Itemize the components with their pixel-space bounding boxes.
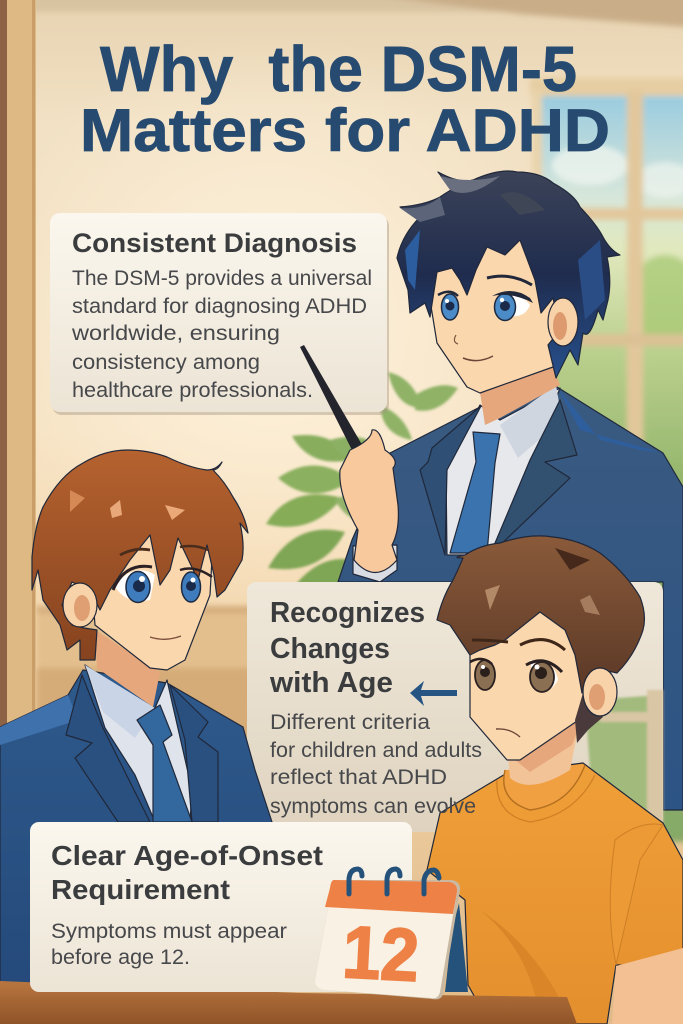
left student eyes — [113, 546, 212, 602]
right student neck — [507, 720, 580, 785]
right student collar — [504, 765, 585, 810]
right student hair — [437, 536, 644, 693]
teacher cuff — [353, 545, 397, 582]
left student tie — [137, 705, 192, 822]
left student lapels — [66, 675, 150, 822]
calendar number: 12 — [341, 910, 421, 997]
plant — [266, 372, 458, 588]
card text: recognizes changes with age — [269, 597, 482, 818]
calendar rings — [349, 869, 439, 894]
arrow — [410, 681, 457, 706]
teacher figure — [338, 171, 683, 810]
right student shirt folds — [610, 824, 663, 965]
body text: before age 12. — [51, 946, 190, 969]
heading: with Age — [269, 667, 393, 699]
left student shirt — [85, 665, 192, 822]
right student ear — [583, 668, 617, 716]
teacher lapels — [420, 406, 481, 555]
heading: Consistent Diagnosis — [72, 228, 357, 258]
right student shirt — [427, 763, 683, 1024]
body text: Symptoms must appear — [51, 920, 287, 943]
right student — [427, 536, 683, 1024]
body text: reflect that ADHD — [270, 766, 447, 789]
body text: symptoms can evolve — [270, 795, 476, 818]
window view through card edge — [585, 690, 663, 832]
heading — [269, 597, 425, 699]
right student arm — [612, 948, 683, 1024]
title: Matters for ADHD — [80, 97, 610, 164]
teacher neck — [480, 367, 560, 425]
icon: calendar — [315, 869, 468, 999]
left student neck — [95, 630, 160, 707]
body text: consistency among — [72, 351, 260, 374]
left student hair — [32, 450, 248, 660]
title — [80, 33, 610, 164]
heading: Clear Age-of-Onset — [51, 840, 323, 871]
teacher face — [430, 225, 572, 393]
card: consistent diagnosis — [50, 213, 389, 415]
right student face — [470, 600, 590, 760]
body text — [51, 920, 287, 969]
body text: worldwide, ensuring — [71, 322, 280, 345]
body text: for children and adults — [270, 739, 482, 762]
right student mouth — [496, 729, 520, 737]
left student — [0, 450, 272, 1000]
title: Why the DSM-5 — [100, 33, 577, 105]
teacher eyes — [438, 276, 533, 320]
card: recognizes changes with age — [247, 582, 663, 832]
body text — [270, 711, 482, 818]
left student face — [90, 515, 213, 670]
teacher shirt and collar — [446, 388, 560, 555]
body text: healthcare professionals. — [72, 379, 313, 402]
heading: Recognizes — [270, 597, 425, 629]
teacher suit — [338, 387, 683, 810]
wainscot panel — [36, 612, 261, 842]
left student suit — [0, 670, 272, 1000]
wooden wall frame — [0, 0, 36, 860]
heading: Changes — [270, 633, 390, 665]
body text: standard for diagnosing ADHD — [72, 295, 367, 318]
left student mouth — [150, 636, 181, 639]
heading: Requirement — [51, 874, 230, 905]
window — [530, 78, 683, 842]
left student ear — [63, 583, 97, 627]
teacher tie — [450, 432, 500, 553]
teacher hair — [397, 171, 620, 378]
pointer and teacher hand — [300, 345, 398, 572]
teacher ear — [548, 298, 578, 346]
right student eyes — [470, 640, 565, 692]
body text: The DSM-5 provides a universal — [72, 267, 372, 290]
teacher nose and smile — [454, 335, 458, 344]
body text — [71, 267, 372, 402]
desk — [0, 981, 577, 1024]
body text: Different criteria — [270, 711, 430, 734]
card: clear age-of-onset requirement — [30, 822, 412, 992]
heading — [51, 840, 323, 905]
